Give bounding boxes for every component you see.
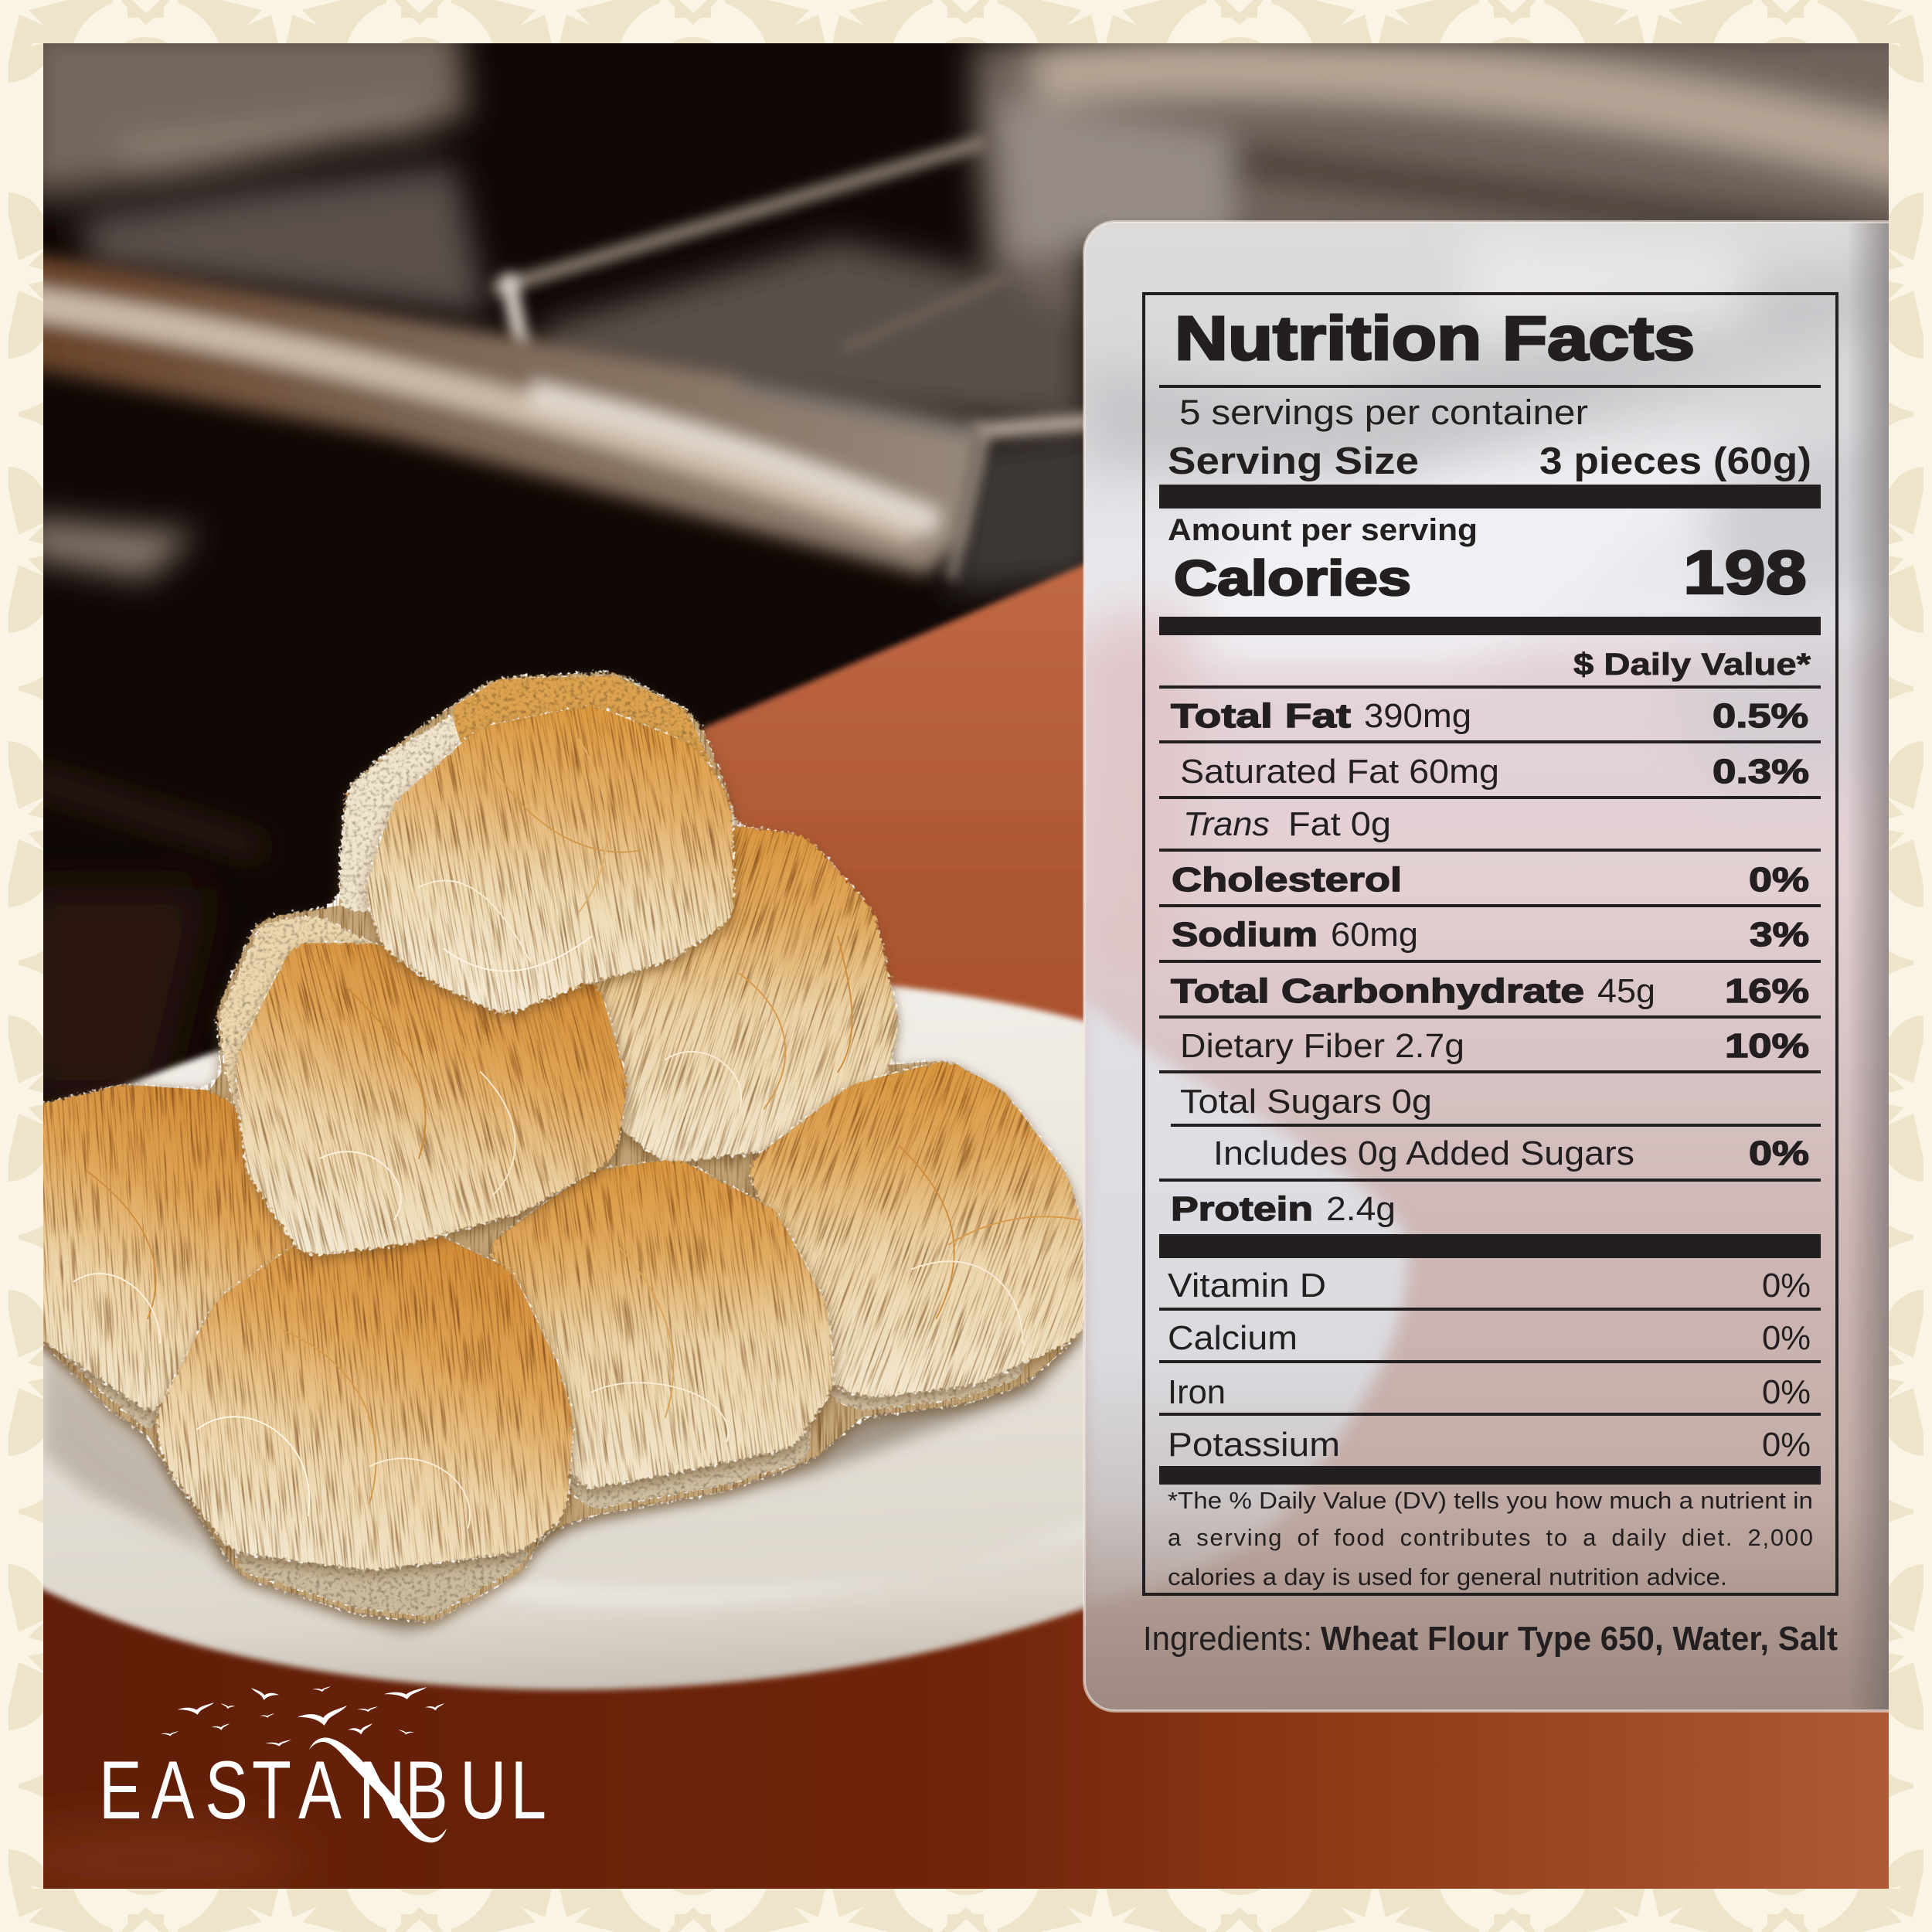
dark reddish shadow [25,887,209,1097]
row: vitamin D [1168,1267,1811,1304]
pastry: top [340,706,518,918]
row: total carbohydrate: Total Carbonhydrate [1171,972,1584,1010]
calories row: 198 [1683,538,1807,607]
ingredients line: Wheat Flour Type 650, Water, Salt [1321,1620,1838,1658]
row: protein: 2.4g [1326,1190,1396,1228]
serving size row: Serving Size [1168,440,1419,482]
logo swash [309,1738,447,1842]
blurred kitchen background [25,25,1922,850]
daily value header: $ Daily Value* [1573,648,1811,682]
serving size row [1168,440,1811,482]
pastry pile [0,641,1203,1623]
logo birds [161,1686,444,1747]
row: vitamin D: Vitamin D [1168,1267,1326,1304]
row: added sugars: Includes 0g Added Sugars [1213,1134,1634,1172]
row: cholesterol [1172,861,1809,899]
pastry: back right [485,731,1000,1257]
row: saturated fat [1180,753,1809,791]
row: potassium: 0% [1762,1426,1811,1464]
row: calcium: Calcium [1168,1319,1298,1357]
blurred pan handle [25,253,985,576]
pastry: middle left [219,916,394,1146]
table surface [0,564,1922,1910]
servings per container: 5 servings per container [1179,393,1588,432]
row: total fat [1171,697,1808,735]
row: cholesterol: Cholesterol [1172,861,1402,899]
stove rods [493,141,1090,579]
row: potassium [1168,1426,1811,1464]
heading: Nutrition Facts: Nutrition Facts [1175,304,1695,372]
row: calcium [1168,1319,1811,1357]
row: trans fat: Fat 0g [1288,805,1391,843]
row: sodium: Sodium [1172,916,1318,954]
row: protein [1171,1190,1396,1228]
footnote: calories a day is used for general nutrition advice. [1168,1563,1727,1590]
row: iron: 0% [1762,1373,1811,1411]
row: saturated fat: 0.3% [1713,753,1809,791]
row: trans fat [1183,805,1391,843]
row: iron: Iron [1168,1373,1226,1411]
row: vitamin D: 0% [1762,1267,1811,1304]
loose pastry strands [74,740,1078,1528]
row: sodium [1172,916,1809,954]
row: total carbohydrate: 16% [1725,972,1809,1010]
row: protein: Protein [1171,1190,1313,1228]
logo wordmark: EASTANBUL [99,1744,546,1836]
serving size row: 3 pieces (60g) [1539,440,1811,482]
row: cholesterol: 0% [1749,861,1809,899]
logo: Eastanbul [99,1686,546,1842]
row: iron [1168,1373,1811,1411]
row: potassium: Potassium [1168,1426,1340,1464]
pastry: far left [62,1306,160,1435]
row: total fat: Total Fat [1171,697,1351,735]
pastry: right [825,1325,1029,1411]
calories row: Calories [1174,550,1411,606]
row: dietary fiber: Dietary Fiber 2.7g [1180,1027,1464,1065]
row: saturated fat: Saturated Fat 60mg [1180,753,1499,791]
pile silhouette [25,672,1090,1623]
panel: frosted glass nutrition card [1084,222,1889,1711]
ingredients line: Ingredients: [1143,1620,1312,1658]
footnote: *The % Daily Value (DV) tells you how much a nutrient in [1168,1487,1813,1514]
row: added sugars: 0% [1749,1134,1809,1172]
amount per serving: Amount per serving [1168,513,1478,547]
row: total sugars: Total Sugars 0g [1180,1083,1432,1121]
plate [0,937,1447,1729]
row: added sugars [1213,1134,1809,1172]
row: trans fat: Trans [1183,805,1270,843]
nutrition label [1144,294,1837,1594]
row: total carbohydrate [1171,972,1809,1010]
footnote [1168,1487,1813,1590]
row: total carbohydrate: 45g [1597,972,1655,1010]
row: sodium: 3% [1750,916,1809,954]
label outer border [1144,294,1837,1594]
row: total fat: 0.5% [1713,697,1808,735]
pastry: front middle [570,1393,813,1509]
footnote: a serving of food contributes to a daily diet. 2,000 [1168,1524,1813,1551]
row: sodium: 60mg [1331,916,1418,954]
row: dietary fiber [1180,1027,1809,1065]
pastry: front left [228,1491,543,1617]
calories row [1174,538,1807,607]
row: dietary fiber: 10% [1725,1027,1809,1065]
row: calcium: 0% [1762,1319,1811,1357]
row: total fat: 390mg [1364,697,1471,735]
